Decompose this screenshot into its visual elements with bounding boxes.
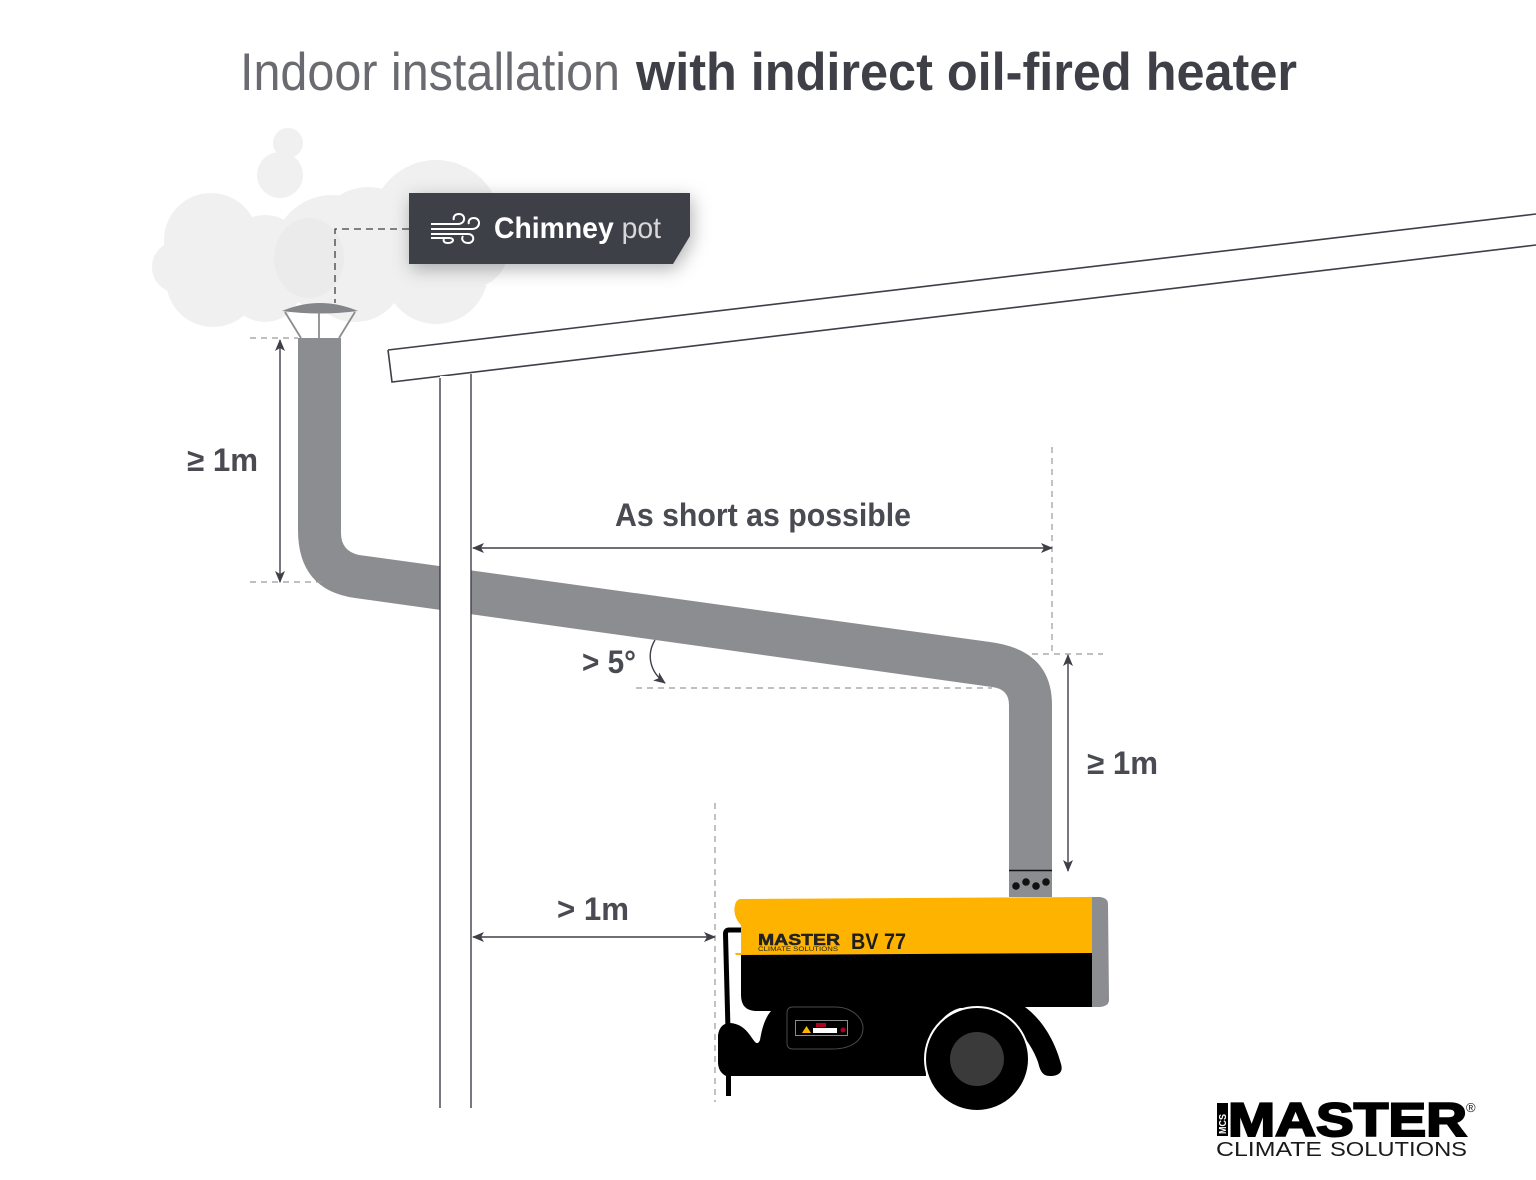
heater wheel [925, 1007, 1029, 1111]
dashed guide lines [250, 338, 1103, 1102]
heater yellow hood [734, 897, 1092, 955]
brand logo: CLIMATE [1216, 1139, 1322, 1161]
heater end cap [1088, 897, 1109, 1007]
pipe collar [1009, 870, 1052, 890]
label: more than 5 degrees: > 5° [582, 644, 636, 680]
brand logo: SOLUTIONS [1330, 1139, 1467, 1161]
label: as short as possible: As short as possible [615, 497, 911, 533]
title [240, 43, 1297, 102]
callout text: Chimney pot [494, 212, 662, 245]
model name: BV 77 [851, 929, 906, 954]
label: at least 1m right: ≥ 1m [1087, 745, 1158, 781]
wall [440, 374, 471, 1108]
leader line [335, 229, 409, 303]
heater logo: CLIMATE SOLUTIONS [758, 947, 838, 953]
callout: chimney pot [409, 193, 690, 264]
flue pipe [298, 338, 1052, 897]
title: with indirect oil-fired heater [635, 43, 1297, 102]
heater logo [758, 932, 841, 953]
label: at least 1m: ≥ 1m [187, 442, 258, 478]
roof [388, 214, 1536, 382]
icon: wind [431, 214, 479, 243]
brand logo: MCS [1218, 1114, 1229, 1134]
control panel [787, 1007, 863, 1049]
brand logo [1216, 1093, 1476, 1161]
label: more than 1m: > 1m [557, 891, 629, 927]
heater handle [726, 930, 741, 1096]
chimney pot [282, 303, 358, 338]
smoke cloud [152, 128, 508, 327]
heater logo: MASTER [758, 932, 841, 949]
brand logo: MASTER [1228, 1093, 1467, 1146]
brand logo: ® [1466, 1100, 1476, 1115]
heater [718, 897, 1109, 1111]
heater lower body [718, 953, 1092, 1076]
dimension: slope angle [582, 640, 665, 683]
title: Indoor installation [240, 43, 620, 102]
